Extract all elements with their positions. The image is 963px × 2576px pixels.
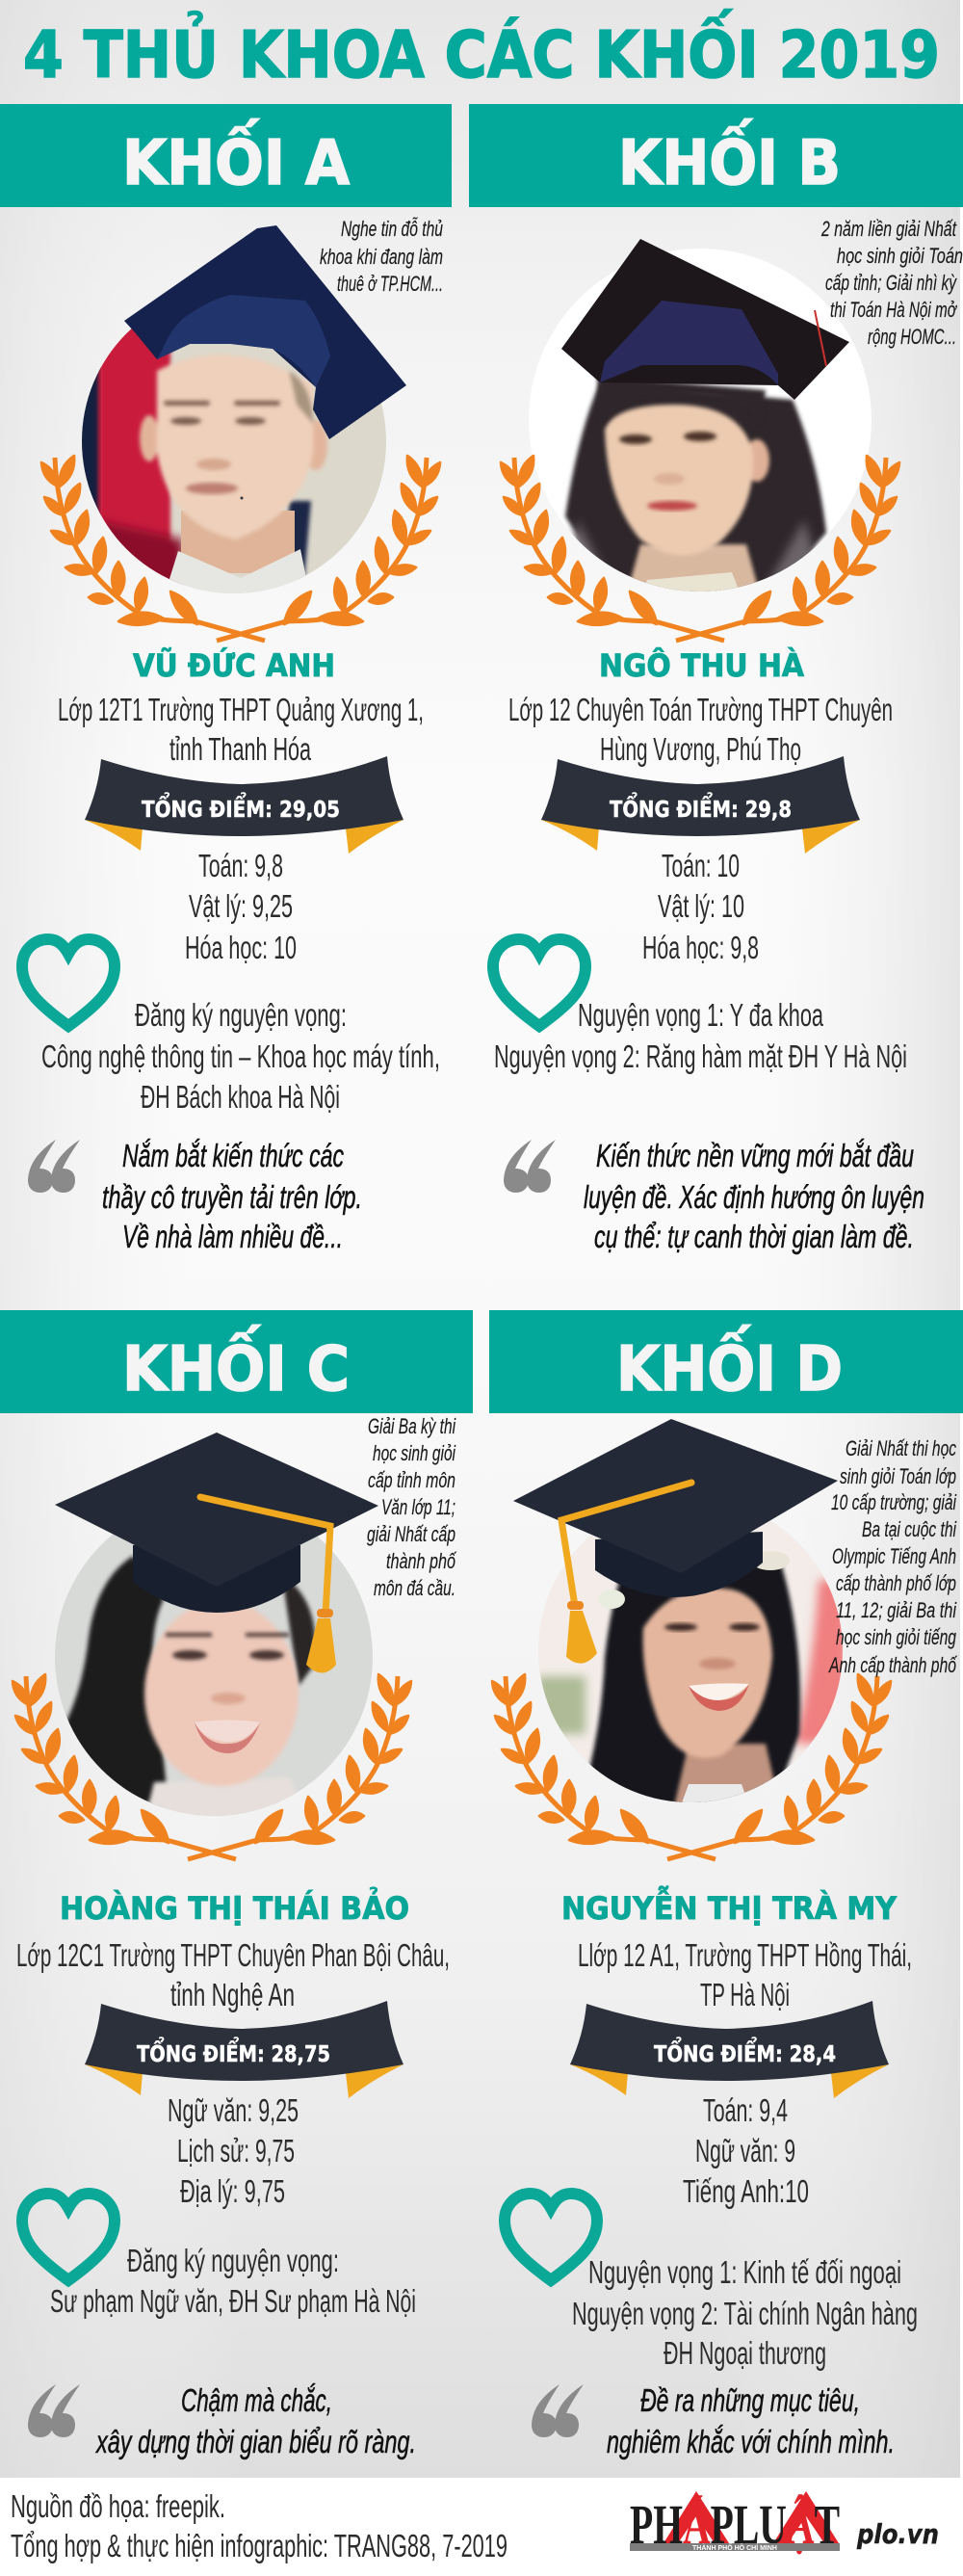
- subject scores: Hóa học: 9,8: [642, 930, 759, 965]
- subject scores: Ngữ văn: 9: [695, 2133, 795, 2169]
- icon: quote mark: [28, 1140, 80, 1193]
- quote: thầy cô truyền tải trên lớp.: [102, 1179, 362, 1215]
- ribbon: total score: TỔNG ĐIỂM: 28,4: [654, 2037, 836, 2067]
- icon: heart: [505, 2194, 597, 2280]
- note: Giải Ba: giải Nhất cấp: [367, 1522, 455, 1546]
- logo: Pháp Luật: THÀNH PHỐ HỒ CHÍ MINH: [692, 2542, 777, 2552]
- quote: [102, 1138, 362, 1254]
- laurel wreath: [41, 456, 440, 641]
- subject scores: [683, 2092, 809, 2209]
- subject scores: Hóa học: 10: [185, 930, 297, 965]
- school: tỉnh Nghệ An: [170, 1977, 295, 2012]
- wishes: Nguyện vọng 1: Y đa khoa: [578, 997, 823, 1033]
- wishes: ĐH Ngoại thương: [664, 2335, 826, 2371]
- footer credits: [11, 2488, 508, 2563]
- wishes: Đăng ký nguyện vọng:: [127, 2243, 339, 2278]
- note: 2 năm liền: [820, 217, 963, 349]
- laurel wreath: [492, 1674, 891, 1859]
- laurel wreath: [501, 456, 899, 641]
- panel: Khối A: [0, 104, 452, 1254]
- note: Giải Ba: thành phố: [386, 1549, 456, 1573]
- note: Nghe tin: thuê ở TP.HCM...: [337, 272, 443, 296]
- wishes: Sư phạm Ngữ văn, ĐH Sư phạm Hà Nội: [50, 2283, 416, 2319]
- subject scores: [642, 848, 759, 965]
- wishes: [41, 997, 440, 1115]
- icon: quote mark: [532, 2384, 584, 2437]
- quote: [607, 2382, 895, 2459]
- ribbon: total score: [570, 2001, 889, 2098]
- laurel wreath: [13, 1674, 411, 1859]
- icon: quote mark: [28, 2384, 80, 2437]
- portrait: Ngô Thu Hà: [529, 239, 872, 597]
- icon: heart: [22, 939, 115, 1026]
- school: TP Hà Nội: [700, 1977, 790, 2012]
- note: Giải Ba: Giải Ba kỳ thi: [368, 1414, 456, 1438]
- panel: Khối D: [489, 1310, 963, 2459]
- ribbon: total score: TỔNG ĐIỂM: 29,05: [142, 792, 340, 823]
- logo: plo.vn: plo.vn: [856, 2518, 939, 2550]
- heading band: Khối C: KHỐI C: [122, 1325, 350, 1406]
- subject scores: [168, 2092, 299, 2209]
- subject scores: [185, 848, 297, 965]
- icon: graduation cap: [55, 1433, 378, 1672]
- note: Giải Nhất: [828, 1436, 957, 1677]
- icon: heart: [22, 2194, 115, 2280]
- ribbon: total score: [541, 756, 860, 854]
- ribbon: total score: TỔNG ĐIỂM: 28,75: [137, 2037, 330, 2067]
- note: Giải Ba: cấp tỉnh môn: [368, 1468, 455, 1492]
- school: [58, 692, 424, 767]
- logo: Pháp Luật: PHÁPLUẬT: [630, 2493, 840, 2556]
- note: Giải Ba: Văn lớp 11;: [381, 1495, 455, 1519]
- subject scores: Toán: 10: [662, 848, 740, 883]
- name: NGÔ THU HÀ: [599, 646, 804, 684]
- wishes: ĐH Bách khoa Hà Nội: [141, 1079, 340, 1115]
- heading band: Khối B: KHỐI B: [618, 118, 841, 199]
- icon: heart: [493, 939, 586, 1026]
- heading band: Khối D: [489, 1310, 963, 1413]
- quote: Nắm bắt kiến thức các: [122, 1138, 344, 1173]
- wishes: Đăng ký nguyện vọng:: [135, 997, 347, 1033]
- subject scores: Tiếng Anh:10: [683, 2173, 809, 2209]
- quote: Đề ra những mục tiêu,: [640, 2382, 860, 2418]
- subject scores: Toán: 9,4: [703, 2092, 788, 2128]
- subject scores: Vật lý: 9,25: [189, 888, 293, 924]
- school: Lớp 12T1 Trường THPT Quảng Xương 1,: [58, 692, 424, 727]
- note: Giải Ba: học sinh giỏi: [373, 1441, 456, 1465]
- name: VŨ ĐỨC ANH: [133, 646, 335, 684]
- ribbon: total score: TỔNG ĐIỂM: 29,8: [610, 792, 792, 823]
- school: [578, 1937, 912, 2012]
- panel: Khối B: [469, 104, 963, 1254]
- name: HOÀNG THỊ THÁI BẢO: [60, 1887, 409, 1927]
- heading band: Khối C: [0, 1310, 473, 1413]
- wishes: [50, 2243, 416, 2319]
- school: [16, 1937, 450, 2012]
- quote: [95, 2382, 416, 2459]
- portrait: Hoàng Thị Thái Bảo: [55, 1433, 378, 1821]
- subject scores: Toán: 9,8: [198, 848, 283, 883]
- school: [508, 692, 893, 767]
- ribbon: total score: [85, 756, 403, 854]
- icon: graduation cap: [513, 1419, 838, 1664]
- icon: quote mark: [504, 1140, 556, 1193]
- footer credits: Tổng hợp & thực hiện infographic: TRANG88, 7-2019: [11, 2528, 508, 2563]
- wishes: Công nghệ thông tin – Khoa học máy tính,: [41, 1038, 440, 1074]
- subject scores: Lịch sử: 9,75: [177, 2133, 295, 2169]
- quote: Chậm mà chắc,: [181, 2382, 332, 2418]
- quote: xây dựng thời gian biểu rõ ràng.: [95, 2424, 416, 2459]
- note: Nghe tin: Nghe tin đỗ thủ: [341, 217, 443, 241]
- note: Nghe tin: [320, 217, 443, 296]
- panel: Khối C: [0, 1310, 473, 2459]
- subject scores: Vật lý: 10: [658, 888, 744, 924]
- wishes: [494, 997, 907, 1074]
- quote: [584, 1138, 924, 1254]
- ribbon: total score: [85, 2001, 403, 2098]
- heading band: Khối B: [469, 104, 963, 207]
- heading band: Khối A: [0, 104, 452, 207]
- school: tỉnh Thanh Hóa: [169, 731, 311, 767]
- quote: Về nhà làm nhiều đề...: [122, 1219, 343, 1254]
- subject scores: Ngữ văn: 9,25: [168, 2092, 299, 2128]
- note: Giải Ba: môn đá cầu.: [374, 1576, 455, 1600]
- school: Lớp 12C1 Trường THPT Chuyên Phan Bội Châu,: [16, 1937, 450, 1973]
- portrait: Vũ Đức Anh: [77, 225, 406, 597]
- subject scores: Địa lý: 9,75: [180, 2173, 285, 2209]
- heading band: Khối D: KHỐI D: [616, 1325, 843, 1406]
- portrait: Nguyễn Thị Trà My: [513, 1419, 847, 1811]
- heading band: Khối A: KHỐI A: [122, 118, 350, 199]
- note: Giải Ba: [367, 1414, 456, 1600]
- school: Hùng Vương, Phú Thọ: [600, 731, 801, 767]
- wishes: [572, 2254, 918, 2371]
- footer credits: Nguồn đồ họa: freepik.: [11, 2488, 225, 2524]
- note: Nghe tin: khoa khi đang làm: [320, 245, 443, 269]
- name: NGUYỄN THỊ TRÀ MY: [561, 1885, 898, 1927]
